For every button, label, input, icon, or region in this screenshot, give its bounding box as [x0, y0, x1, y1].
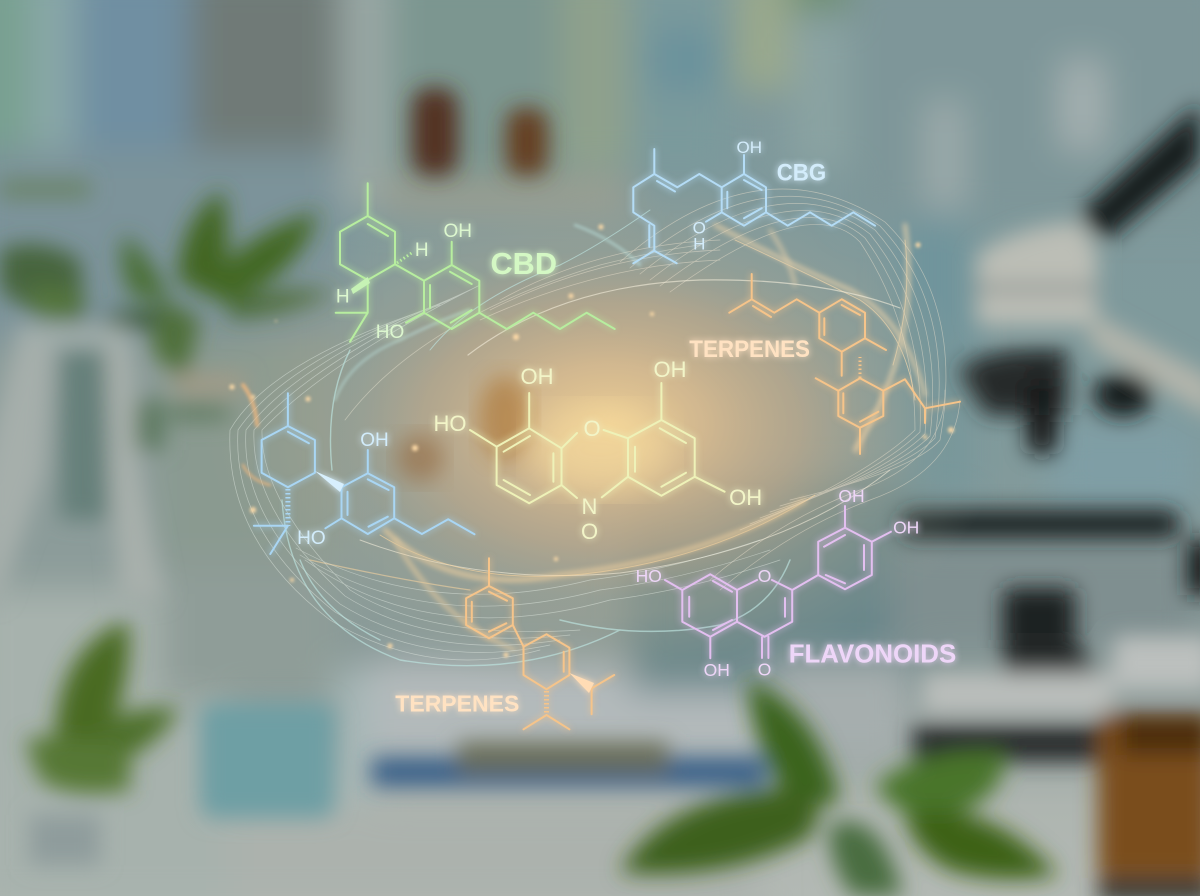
- left mesh: [230, 285, 780, 660]
- molecule: flavonoids: OH: [838, 486, 865, 506]
- molecule: central yellow compound: N: [582, 494, 597, 519]
- molecule: flavonoids: HO: [636, 566, 662, 586]
- molecule: CBD: H: [415, 240, 429, 261]
- label: terpenes lower: TERPENES: [395, 691, 519, 717]
- molecule: CBD: [336, 183, 615, 343]
- molecule: blue cannabinoid left: OH: [360, 430, 389, 451]
- molecule: central yellow compound: [434, 357, 762, 544]
- left orange accents: [243, 385, 270, 485]
- molecule: central yellow compound: OH: [654, 357, 686, 382]
- molecule: flavonoids: O: [758, 660, 771, 680]
- molecule: central yellow compound: HO: [434, 411, 466, 436]
- teal wisps: [282, 210, 790, 666]
- lower orange band: [310, 495, 815, 650]
- molecule: CBD: H: [336, 286, 350, 308]
- molecule: CBD: HO: [376, 322, 404, 343]
- inner bright ellipse: [345, 245, 900, 576]
- molecule: CBG: O: [693, 218, 706, 238]
- blue jar: [200, 703, 335, 818]
- molecule: CBG: [633, 138, 875, 263]
- central warm glow: [200, 165, 1000, 695]
- molecule: central yellow compound: O: [581, 519, 598, 544]
- molecule: terpenes lower: [395, 558, 614, 729]
- energy swirl lines: [230, 189, 960, 666]
- bottles on shelf: [412, 88, 458, 176]
- molecule: central yellow compound: O: [583, 416, 601, 441]
- orange swoosh upper right: [715, 225, 925, 450]
- blue strip: [372, 758, 765, 786]
- molecule: central yellow compound: OH: [520, 364, 554, 389]
- microscope: [1078, 103, 1200, 241]
- label: CBG: CBG: [777, 160, 826, 187]
- label: flavonoids: FLAVONOIDS: [789, 639, 956, 669]
- top right mesh: [480, 189, 960, 590]
- molecule: CBD: OH: [443, 221, 472, 242]
- label: CBD: CBD: [490, 246, 557, 281]
- label: terpenes upper: TERPENES: [689, 336, 810, 363]
- molecule: blue cannabinoid left: [254, 393, 474, 554]
- molecule: blue cannabinoid left: HO: [297, 528, 326, 549]
- molecule: flavonoids: O: [758, 566, 771, 586]
- molecule: CBG: OH: [737, 138, 762, 157]
- plant leaves: [178, 190, 228, 300]
- molecule: CBG: H: [693, 234, 705, 254]
- molecule: terpenes upper right: [689, 274, 960, 454]
- molecule: flavonoids: OH: [893, 518, 919, 538]
- sparkles: [230, 224, 954, 658]
- molecule: flavonoids: OH: [704, 660, 730, 680]
- flask: [15, 325, 130, 347]
- foreground leaves: [748, 680, 840, 805]
- molecule: flavonoids: [636, 486, 956, 680]
- molecule: central yellow compound: OH: [729, 485, 762, 510]
